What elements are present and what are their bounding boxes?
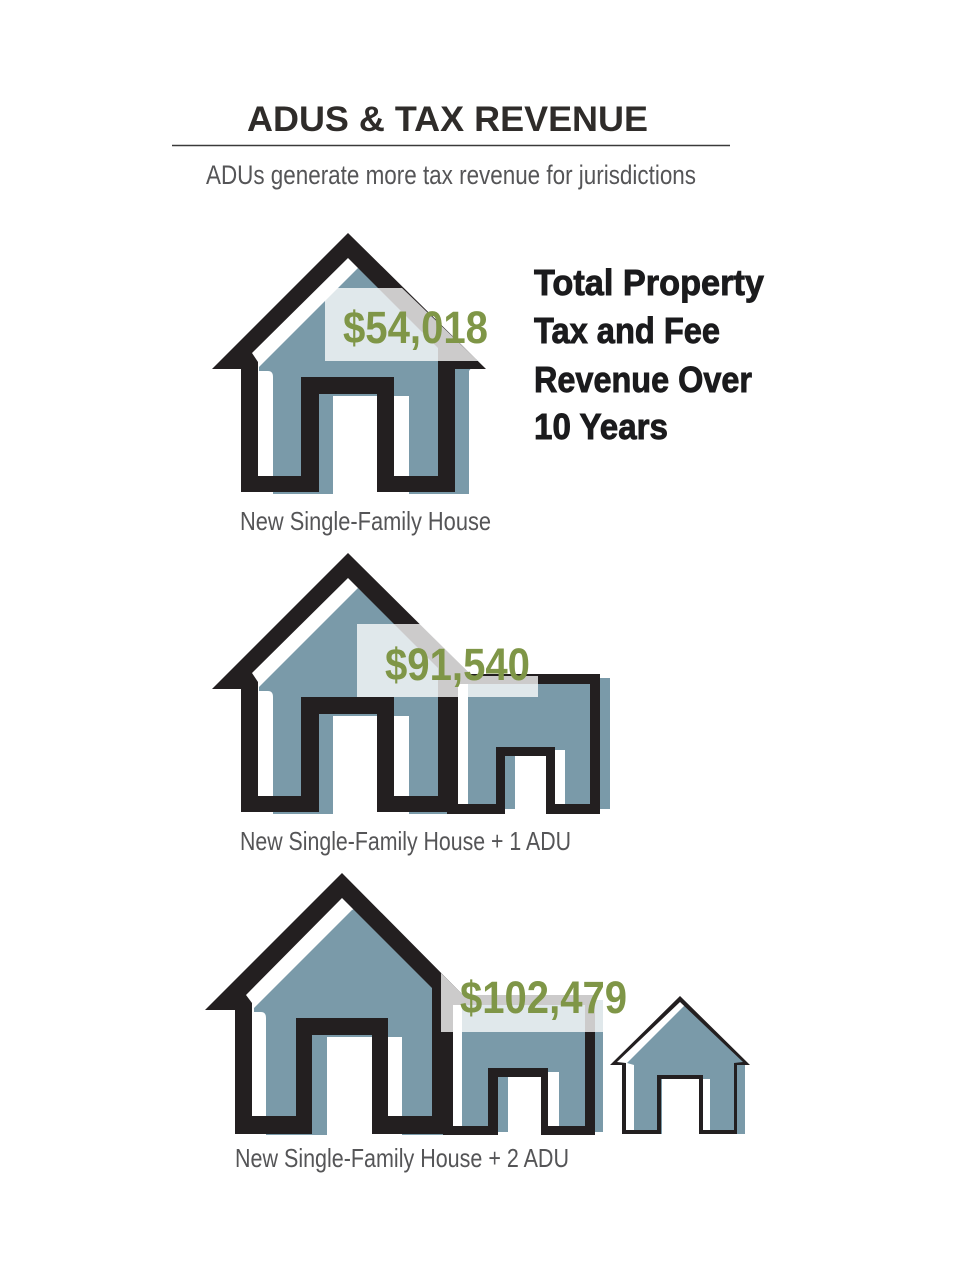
value: 102,479: $102,479 bbox=[460, 972, 627, 1023]
icon: house and ADU blue fill bbox=[259, 588, 610, 814]
side heading: total property tax and fee revenue bbox=[534, 262, 764, 447]
panel: new single-family house plus 2 ADU bbox=[205, 873, 750, 1173]
icon: house outline bbox=[212, 233, 486, 492]
side heading: total property tax and fee revenue: Tax and Fee bbox=[534, 310, 720, 351]
side heading: total property tax and fee revenue: 10 Years bbox=[534, 406, 668, 447]
icon: house and ADU outline bbox=[205, 873, 595, 1135]
icon: house and ADU blue fill bbox=[254, 908, 603, 1135]
side heading: total property tax and fee revenue: Revenue Over bbox=[534, 359, 752, 400]
panel: new single-family house bbox=[212, 233, 491, 536]
value backing panel bbox=[441, 973, 603, 1032]
panel: new single-family house plus 1 ADU bbox=[212, 553, 610, 856]
value backing panel bbox=[357, 624, 538, 697]
label: New Single-Family House bbox=[240, 506, 491, 536]
title: ADUS & TAX REVENUE bbox=[247, 100, 648, 139]
value: 91,540: $91,540 bbox=[385, 639, 530, 690]
icon: house and ADU outline bbox=[212, 553, 600, 814]
icon: house blue fill bbox=[259, 268, 477, 494]
label: New Single-Family House + 1 ADU bbox=[240, 826, 571, 856]
label: New Single-Family House + 2 ADU bbox=[235, 1143, 569, 1173]
side heading: total property tax and fee revenue: Total Property bbox=[534, 262, 764, 303]
value: 54,018: $54,018 bbox=[343, 302, 488, 353]
value backing panel bbox=[325, 288, 478, 361]
icon: small house outline bbox=[610, 996, 750, 1134]
icon: small house blue fill bbox=[627, 1004, 745, 1134]
subtitle: ADUs generate more tax revenue for jurisdictions bbox=[206, 160, 696, 190]
